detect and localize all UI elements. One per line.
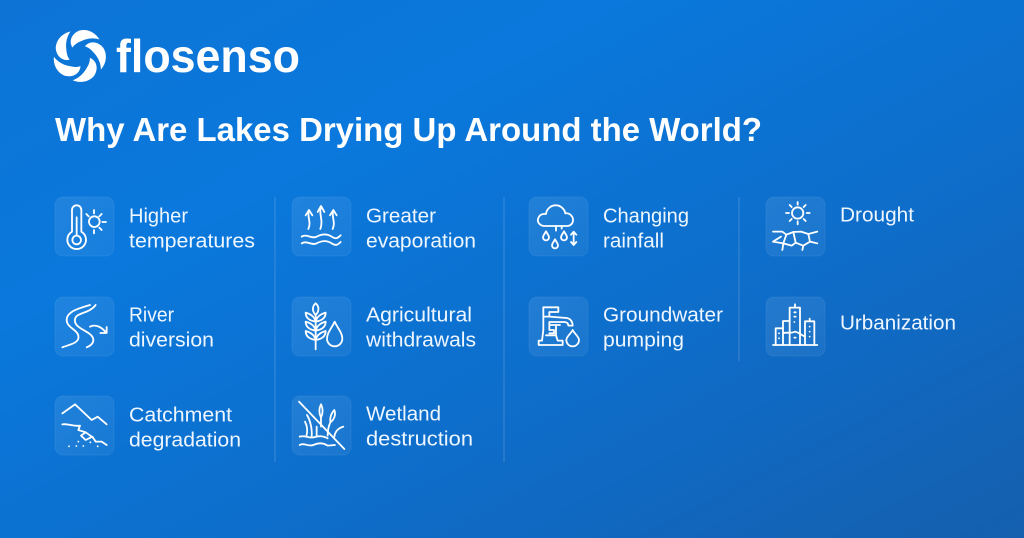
item: river diversion: diversion	[129, 330, 214, 352]
item: wetland destruction: destruction	[366, 428, 473, 450]
icon: river with arrow	[62, 305, 107, 347]
item: changing rainfall	[529, 197, 689, 256]
item: agricultural withdrawals: withdrawals	[365, 330, 476, 352]
item: catchment degradation: degradation	[129, 430, 241, 452]
item: groundwater pumping	[529, 297, 723, 356]
label: Changing	[603, 206, 689, 228]
icon: city skyline	[773, 304, 817, 345]
icon: cloud with rain drops	[538, 205, 576, 248]
item: greater evaporation	[292, 197, 476, 256]
item: higher temperatures: temperatures	[129, 230, 255, 252]
label: River	[129, 304, 174, 326]
icon: wheat and water drop	[306, 303, 342, 349]
logo: flosenso	[48, 29, 300, 88]
label: Urbanization	[840, 312, 956, 334]
icon: thermometer and sun	[67, 205, 106, 249]
label: Agricultural	[366, 304, 472, 326]
item: changing rainfall: rainfall	[603, 230, 664, 252]
label: Higher	[129, 206, 188, 228]
label: Groundwater	[603, 304, 723, 326]
label: Greater	[366, 206, 436, 228]
item: wetland destruction	[292, 396, 473, 455]
label: Drought	[840, 204, 914, 226]
label: Wetland	[366, 404, 441, 426]
icon: sun over cracked ground	[773, 202, 817, 250]
icon: rising vapour over water	[302, 206, 341, 245]
icon: faucet and drop	[539, 307, 579, 346]
item: drought	[766, 197, 914, 256]
icon: crossed-out reeds	[299, 402, 344, 449]
item: greater evaporation: evaporation	[366, 230, 476, 252]
icon: logo swirl	[48, 29, 110, 88]
item: river diversion	[55, 297, 214, 356]
item: groundwater pumping: pumping	[603, 330, 684, 352]
item: higher temperatures	[55, 197, 255, 256]
label: Catchment	[129, 404, 232, 426]
item: urbanization	[766, 297, 956, 356]
title: Why Are Lakes Drying Up Around the World?	[55, 111, 762, 148]
item: catchment degradation	[55, 396, 241, 455]
icon: eroding hills	[62, 404, 107, 446]
logo wordmark: flosenso	[116, 30, 300, 82]
item: agricultural withdrawals	[292, 297, 476, 356]
